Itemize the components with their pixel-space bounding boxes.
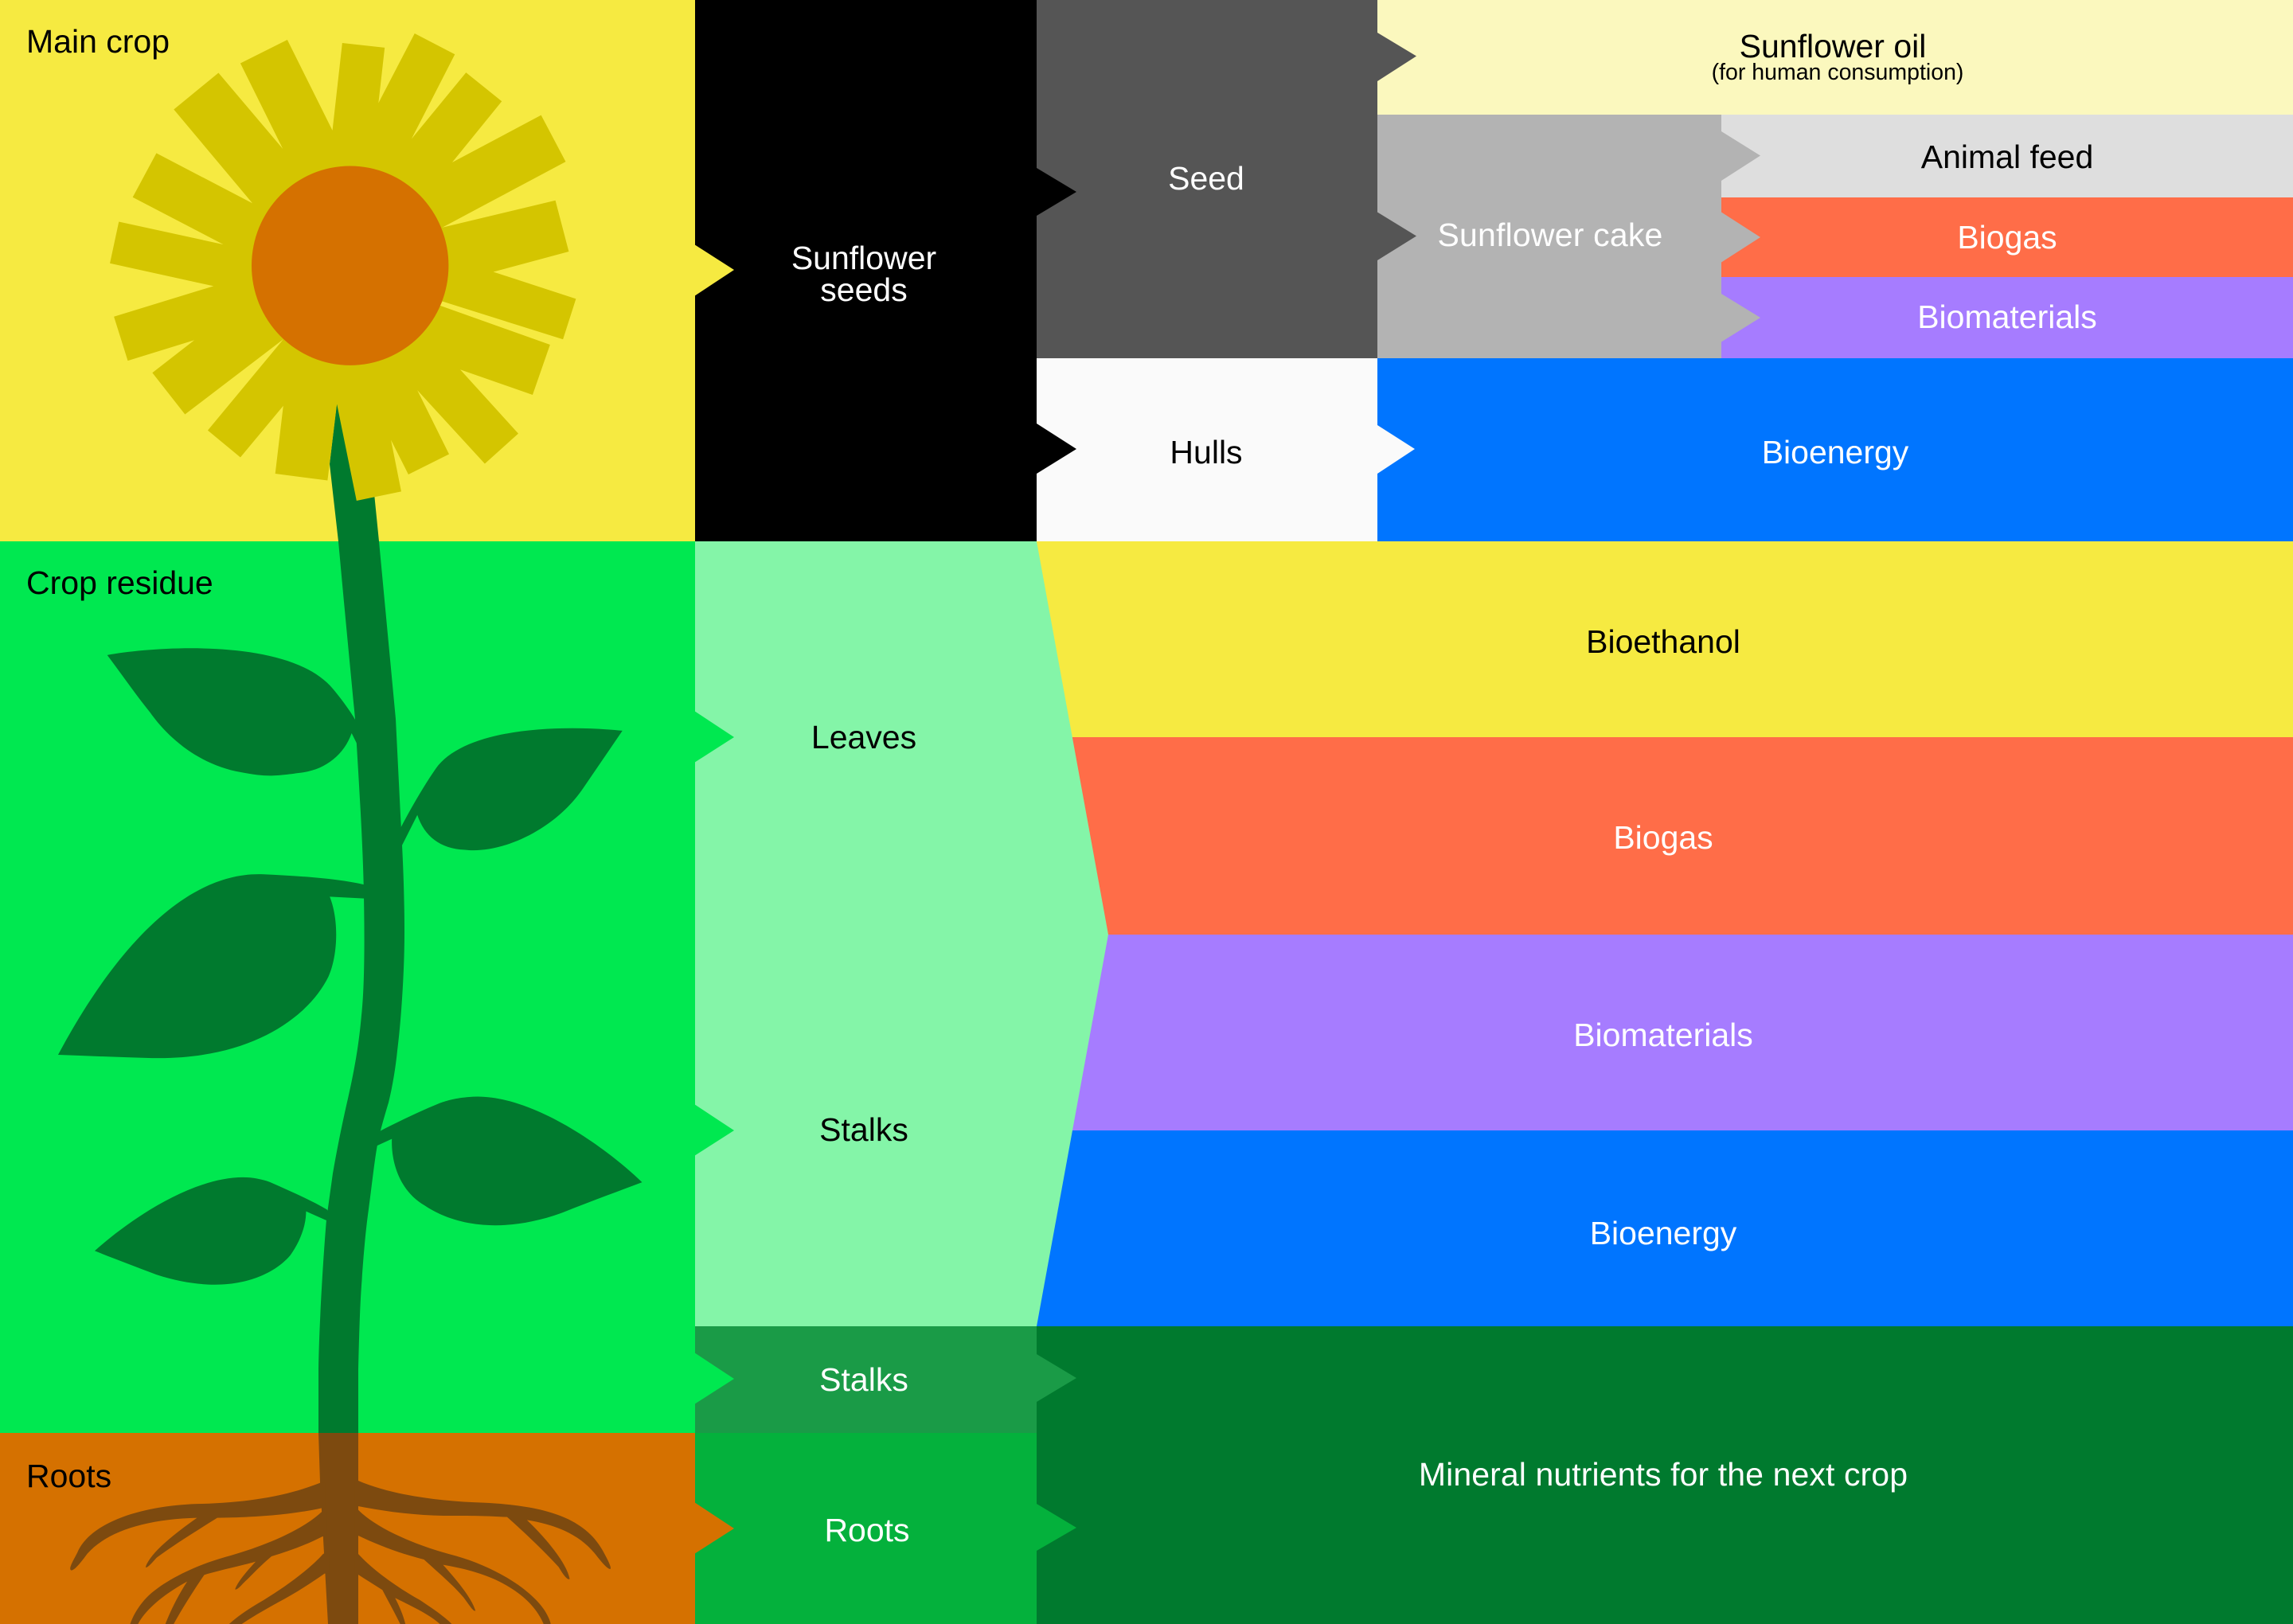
- panel: animal feed: [1721, 115, 2293, 197]
- arrow: hulls to bioenergy: [1377, 425, 1415, 474]
- panel: leaves and stalks funnel: [695, 541, 1108, 1326]
- label: biogas small: Biogas: [1957, 219, 2057, 256]
- panel: bioenergy small: [1377, 358, 2293, 541]
- icon: leaf lower right: [371, 1096, 642, 1225]
- icon: sunflower petals: [110, 33, 576, 501]
- panel: sunflower oil: [1377, 0, 2293, 115]
- label: biogas large: Biogas: [1613, 819, 1713, 856]
- label: for human consumption: (for human consumption): [1712, 60, 1963, 85]
- panel: mineral nutrients: [1037, 1326, 2293, 1624]
- panel: stalks to soil: [695, 1326, 1037, 1433]
- panel: bioethanol: [1037, 541, 2293, 737]
- label: leaves: Leaves: [811, 719, 916, 755]
- label: bioethanol: Bioethanol: [1586, 623, 1740, 660]
- arrow: cake to biomaterials: [1721, 294, 1760, 342]
- label: sunflower cake: Sunflower cake: [1437, 217, 1663, 253]
- panel: seed: [1037, 0, 1377, 358]
- panel: crop residue background: [0, 541, 695, 1433]
- icon: leaf large left: [58, 874, 371, 1058]
- arrow: stalks to mineral nutrients: [1037, 1354, 1076, 1402]
- heading: roots: Roots: [26, 1458, 111, 1494]
- label: bioenergy small: Bioenergy: [1762, 434, 1909, 470]
- label: sunflower seeds: Sunflower: [791, 240, 936, 276]
- icon: leaf lower left: [95, 1177, 333, 1285]
- arrow: seeds to hulls: [1037, 424, 1076, 474]
- heading: crop residue: Crop residue: [26, 564, 213, 601]
- label: stalks: Stalks: [819, 1111, 908, 1148]
- arrow: main crop to sunflower seeds: [694, 244, 734, 296]
- panel: roots to soil: [695, 1433, 1037, 1624]
- arrow: crop residue to leaves: [694, 711, 734, 763]
- label: seed: Seed: [1168, 160, 1244, 197]
- panel: biogas large: [1037, 737, 2293, 935]
- icon: leaf upper right: [393, 728, 623, 850]
- arrow: seeds to seed: [1037, 168, 1076, 216]
- arrow: cake to biogas: [1721, 212, 1760, 263]
- label: animal feed: Animal feed: [1921, 139, 2093, 175]
- icon: root system: [70, 1433, 611, 1624]
- label: biomaterials large: Biomaterials: [1573, 1017, 1753, 1053]
- panel: hulls: [1037, 358, 1377, 541]
- panel: sunflower cake: [1377, 115, 1721, 358]
- arrow: roots to mineral nutrients: [1037, 1504, 1076, 1551]
- label: biomaterials small: Biomaterials: [1917, 299, 2097, 335]
- label: sunflower oil: Sunflower oil: [1740, 28, 1926, 64]
- panel: bioenergy large: [1037, 1130, 2293, 1326]
- label: roots for soil: Roots: [824, 1512, 910, 1548]
- label: hulls: Hulls: [1170, 434, 1243, 470]
- panel: biomaterials large: [1037, 935, 2293, 1130]
- label: stalks for soil: Stalks: [819, 1361, 908, 1398]
- arrow: roots source to roots: [694, 1502, 734, 1554]
- arrow: crop residue to stalks: [694, 1104, 734, 1156]
- heading: main crop: Main crop: [26, 23, 170, 60]
- arrow: cake to animal feed: [1721, 131, 1760, 181]
- label: sunflower seeds: seeds: [820, 271, 908, 308]
- panel: main crop background: [0, 0, 695, 541]
- label: mineral nutrients: Mineral nutrients for the next crop: [1419, 1456, 1908, 1493]
- icon: leaf upper left: [107, 648, 364, 775]
- panel: biomaterials small: [1721, 277, 2293, 358]
- arrow: seed to sunflower oil: [1377, 33, 1416, 81]
- icon: sunflower plant stem: [318, 404, 404, 1433]
- arrow: seed to sunflower cake: [1377, 212, 1416, 260]
- icon: sunflower centre disc: [252, 166, 448, 365]
- arrow: crop residue to stalks for soil: [694, 1353, 734, 1404]
- panel: sunflower seeds: [695, 0, 1037, 541]
- panel: roots background: [0, 1433, 695, 1624]
- panel: biogas small: [1721, 197, 2293, 277]
- label: bioenergy large: Bioenergy: [1590, 1215, 1737, 1251]
